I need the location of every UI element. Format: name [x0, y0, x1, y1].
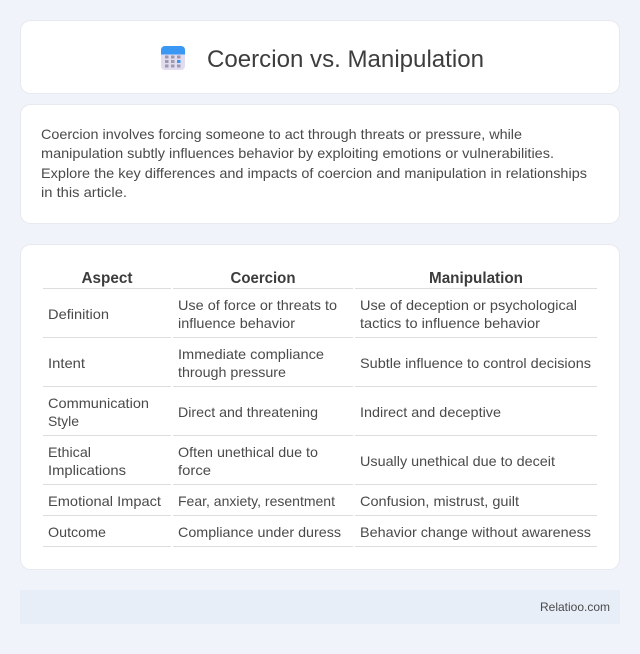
- row: Definition: Use of force or threats to: [178, 297, 337, 313]
- row: Intent: Subtle influence to control decisions: [360, 355, 591, 371]
- row: Emotional Impact: Confusion, mistrust, guilt: [360, 493, 519, 509]
- row: Definition: Definition: [48, 306, 109, 322]
- row: Outcome: Compliance under duress: [178, 524, 341, 540]
- row: Emotional Impact: Fear, anxiety, resentment: [178, 493, 335, 509]
- table header: Aspect: [82, 270, 132, 287]
- footer: [20, 590, 620, 624]
- row: Intent: through pressure: [178, 364, 286, 380]
- row: Communication Style: Style: [48, 413, 79, 429]
- panel: title card: [20, 20, 620, 94]
- row: Intent: [48, 346, 591, 380]
- row: Ethical Implications: force: [178, 462, 211, 478]
- row: Intent: Intent: [48, 355, 85, 371]
- text block: introduction paragraph: Explore the key differences and impacts of coercion and manipulation in relationships: [41, 165, 587, 181]
- table header: Coercion: [230, 270, 296, 287]
- row: Intent: Immediate compliance: [178, 346, 324, 362]
- panel: introduction: [20, 104, 620, 224]
- panel: comparison table: [20, 244, 620, 570]
- text block: introduction paragraph: in this article.: [41, 184, 127, 200]
- row: Ethical Implications: Implications: [48, 462, 126, 478]
- table header: Manipulation: [429, 270, 523, 287]
- row: Communication Style: [48, 395, 501, 429]
- row: Ethical Implications: Often unethical due to: [178, 444, 318, 460]
- row: Definition: Use of deception or psychological: [360, 297, 577, 313]
- row: Communication Style: Communication: [48, 395, 149, 411]
- row: Ethical Implications: [48, 444, 555, 478]
- row: Definition: tactics to influence behavior: [360, 315, 540, 331]
- row: Communication Style: Indirect and deceptive: [360, 404, 501, 420]
- text block: introduction paragraph: Coercion involves forcing someone to act through threats or pressure, while: [41, 126, 522, 142]
- row: Definition: [48, 297, 577, 331]
- row: Communication Style: Direct and threatening: [178, 404, 318, 420]
- text block: introduction paragraph: [41, 126, 587, 200]
- row: Emotional Impact: [48, 493, 519, 509]
- row: Outcome: Outcome: [48, 524, 106, 540]
- row: Outcome: Behavior change without awareness: [360, 524, 591, 540]
- row: Ethical Implications: Ethical: [48, 444, 91, 460]
- row: Definition: influence behavior: [178, 315, 295, 331]
- footer: Relatioo.com: [540, 600, 610, 614]
- row: Ethical Implications: Usually unethical due to deceit: [360, 453, 555, 469]
- icon: calendar: [161, 46, 185, 70]
- row: Outcome: [48, 524, 591, 540]
- table header: [82, 270, 523, 287]
- text block: introduction paragraph: manipulation subtly influences behavior by exploiting emotions or vulnerabilities.: [41, 145, 554, 161]
- title: Coercion vs. Manipulation: [207, 46, 484, 73]
- row: Emotional Impact: Emotional Impact: [48, 493, 161, 509]
